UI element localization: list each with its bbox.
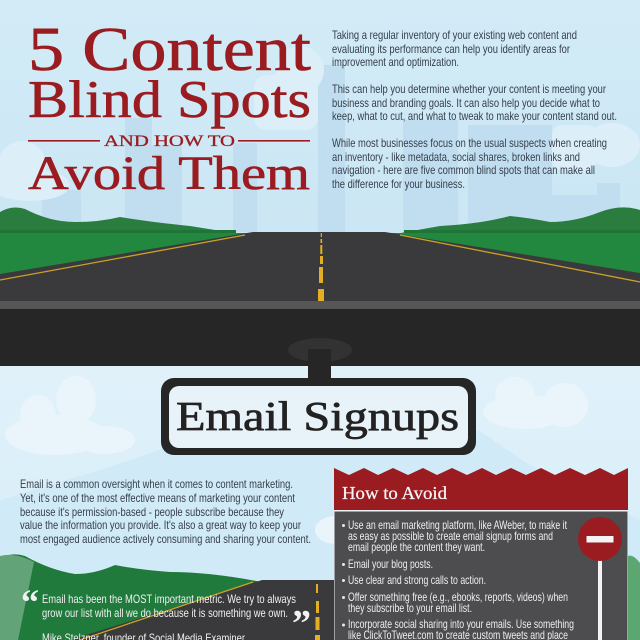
road — [0, 232, 640, 366]
bullet list: they subscribe to your email list. — [348, 601, 472, 615]
intro text: Taking a regular inventory of your existing web content and — [332, 28, 577, 42]
panel header: How to Avoid — [342, 483, 447, 503]
intro text: the difference for your business. — [332, 177, 465, 191]
road sign mount and post — [288, 338, 352, 385]
email paragraph: because it's permission-based - people subscribe because they — [20, 505, 284, 519]
header sky with skyline and clouds — [0, 0, 640, 235]
intro text — [332, 28, 617, 191]
section sign: Email Signups: Email Signups — [176, 393, 459, 439]
bullet list: Offer something free (e.g., ebooks, reports, videos) when — [348, 590, 568, 604]
quote: grow our list with all we do because it is something we own. — [42, 606, 288, 620]
bullet list: Use an email marketing platform, like AWeber, to make it — [348, 518, 568, 532]
intro text: improvement and optimization. — [332, 55, 459, 69]
title: Blind Spots — [28, 71, 311, 129]
intro text: evaluating its performance can help you identify areas for — [332, 42, 570, 56]
intro text: an inventory - like metadata, social shares, broken links and — [332, 150, 580, 164]
panel: how to avoid — [334, 468, 628, 640]
panel header — [334, 468, 628, 510]
icon: no entry road sign — [578, 517, 622, 640]
quote: “ — [21, 582, 39, 622]
title: 5 Content — [28, 16, 311, 84]
green hills — [0, 207, 640, 234]
quote: Email has been the MOST important metric. We try to always — [42, 592, 296, 606]
lower sky with clouds and mountains — [0, 366, 640, 640]
title: AND HOW TO — [104, 133, 235, 150]
quote — [21, 582, 311, 640]
email paragraph: value the information you provide. It's also a great way to keep your — [20, 518, 301, 532]
title: Avoid Them — [28, 147, 310, 200]
email paragraph: Email is a common oversight when it comes to content marketing. — [20, 477, 293, 491]
email paragraph: most engaged audience actively consuming and sharing your content. — [20, 532, 311, 546]
email paragraph — [20, 477, 311, 546]
bullet list: as easy as possible to create email signup forms and — [348, 529, 553, 543]
section sign: Email Signups — [161, 378, 476, 455]
bullet list — [342, 518, 574, 640]
bullet list: Email your blog posts. — [348, 557, 433, 571]
bullet list: email people the content they want. — [348, 540, 485, 554]
lower landscape — [0, 554, 640, 640]
title — [28, 16, 311, 200]
email paragraph: Yet, it's one of the most effective means of marketing your content — [20, 491, 296, 505]
bullet list: Use clear and strong calls to action. — [348, 573, 486, 587]
